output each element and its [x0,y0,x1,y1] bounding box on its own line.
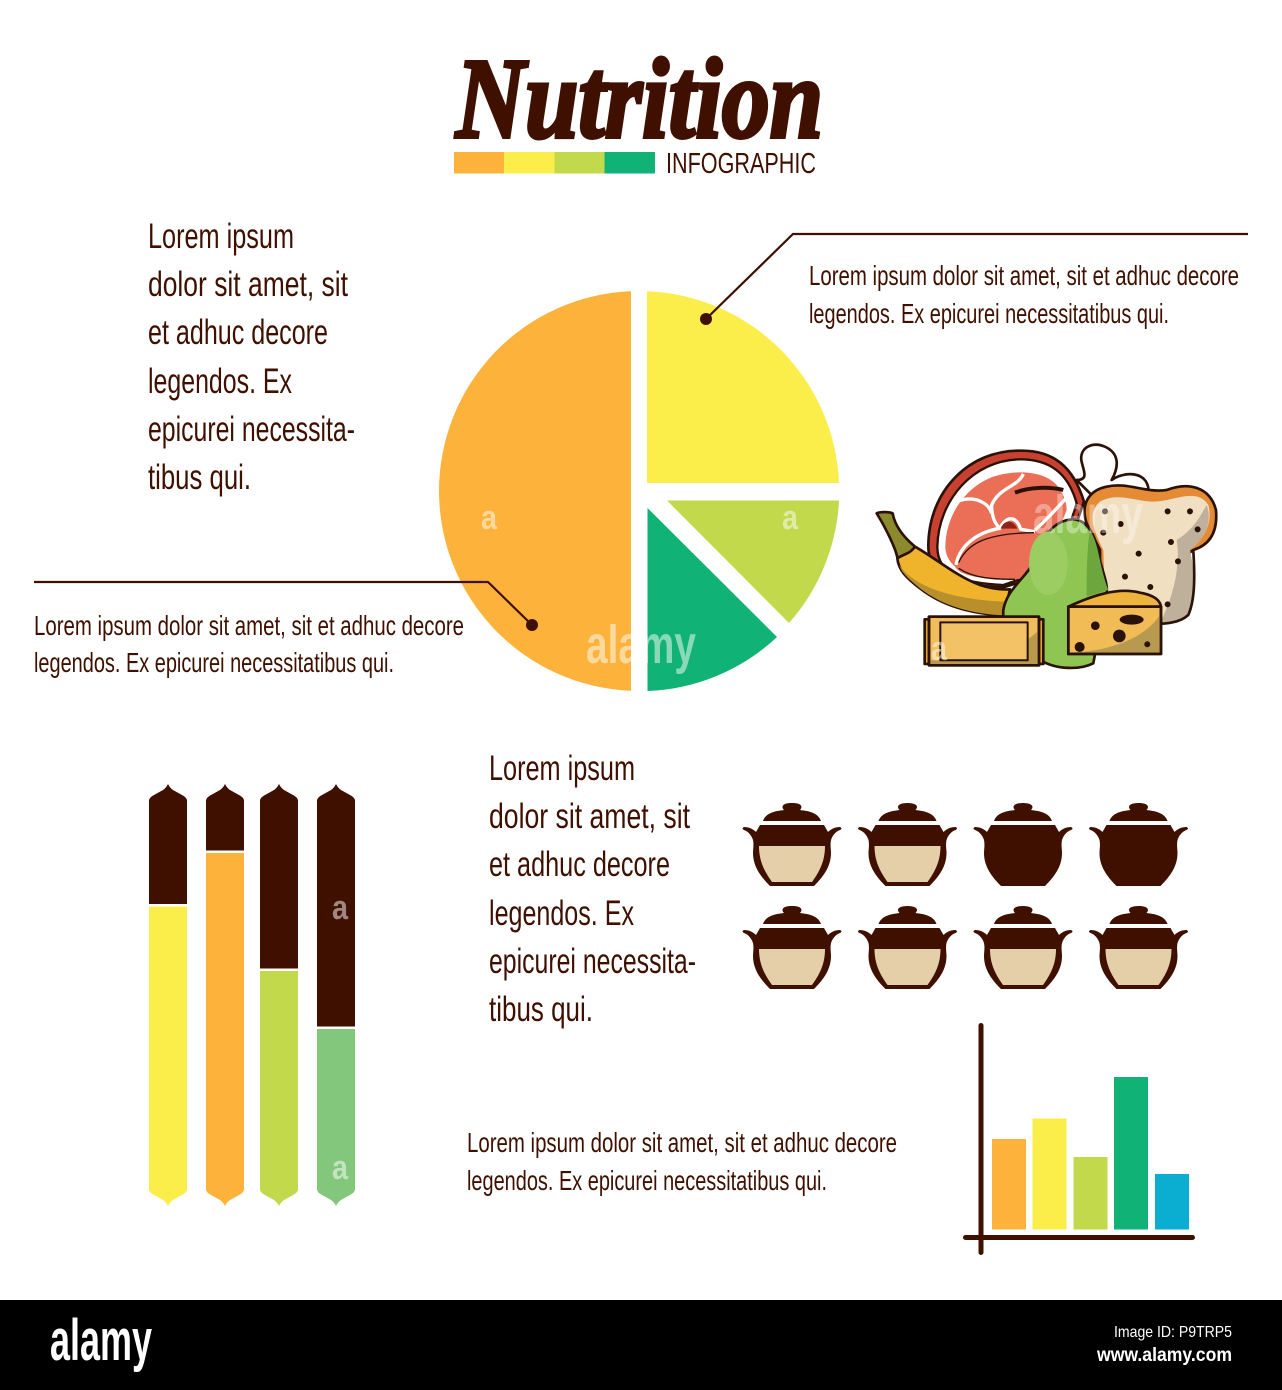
text block: middle: epicurei necessita- [489,942,696,981]
bar 1 [149,784,187,1206]
text block: bottom: Lorem ipsum dolor sit amet, sit et adhuc decore [467,1127,897,1158]
icon: chicken bone [1077,445,1149,497]
watermarks: alamy [586,615,696,675]
callout text: top right [809,260,1239,329]
text block: top left: dolor sit amet, sit [148,265,348,304]
icon: banana [877,512,1010,615]
watermarks: alamy [1033,485,1143,545]
icon: pear [1003,519,1108,668]
stacked bars [149,784,355,1206]
text block: top left: legendos. Ex [148,362,292,401]
text block: bottom [467,1127,897,1196]
footer url: www.alamy.com [1096,1345,1232,1366]
bar chart [966,1026,1192,1252]
pie chart [439,291,839,691]
bar 4 [317,784,355,1206]
callout: orange slice [34,582,538,631]
icon: food group [877,445,1216,668]
text block: top left: et adhuc decore [148,313,328,352]
text block: middle: dolor sit amet, sit [489,797,690,836]
callout text: left: Lorem ipsum dolor sit amet, sit et adhuc decore [34,610,464,641]
pot row 1 [742,803,1188,886]
bar 3 [260,784,298,1206]
footer bar [0,1300,1282,1390]
callout: yellow slice [700,234,1248,325]
watermarks: a [931,630,948,668]
pot pictogram grid [742,803,1188,989]
text block: middle [489,749,696,1029]
footer logo: alamy [50,1308,152,1373]
text block: top left: tibus qui. [148,458,251,497]
icon: bread slice [1085,485,1216,624]
callout text: left: legendos. Ex epicurei necessitatibus qui. [34,647,394,678]
title: Nutrition [454,35,823,162]
text block: bottom: legendos. Ex epicurei necessitatibus qui. [467,1165,827,1196]
watermarks: a [782,499,799,537]
callout text: left [34,610,464,678]
icon: ham steak [928,451,1084,587]
text block: middle: et adhuc decore [489,845,670,884]
text block: top left: epicurei necessita- [148,410,355,449]
text block: middle: legendos. Ex [489,894,634,933]
text block: middle: Lorem ipsum [489,749,635,788]
text block: top left [148,217,355,497]
subtitle: INFOGRAPHIC [666,148,816,180]
watermarks: a [332,889,349,927]
watermarks: a [332,1149,349,1187]
bar 2 [206,784,244,1206]
pot row 2 [742,906,1188,989]
watermarks: a [481,499,498,537]
text block: top left: Lorem ipsum [148,217,294,256]
text block: middle: tibus qui. [489,990,593,1029]
footer image id: Image ID: P9TRP5 [1114,1324,1232,1341]
watermarks [332,485,1143,1187]
icon: snack bar [925,617,1043,665]
icon: cheese wedge [1068,591,1161,654]
colour strip [454,152,655,174]
